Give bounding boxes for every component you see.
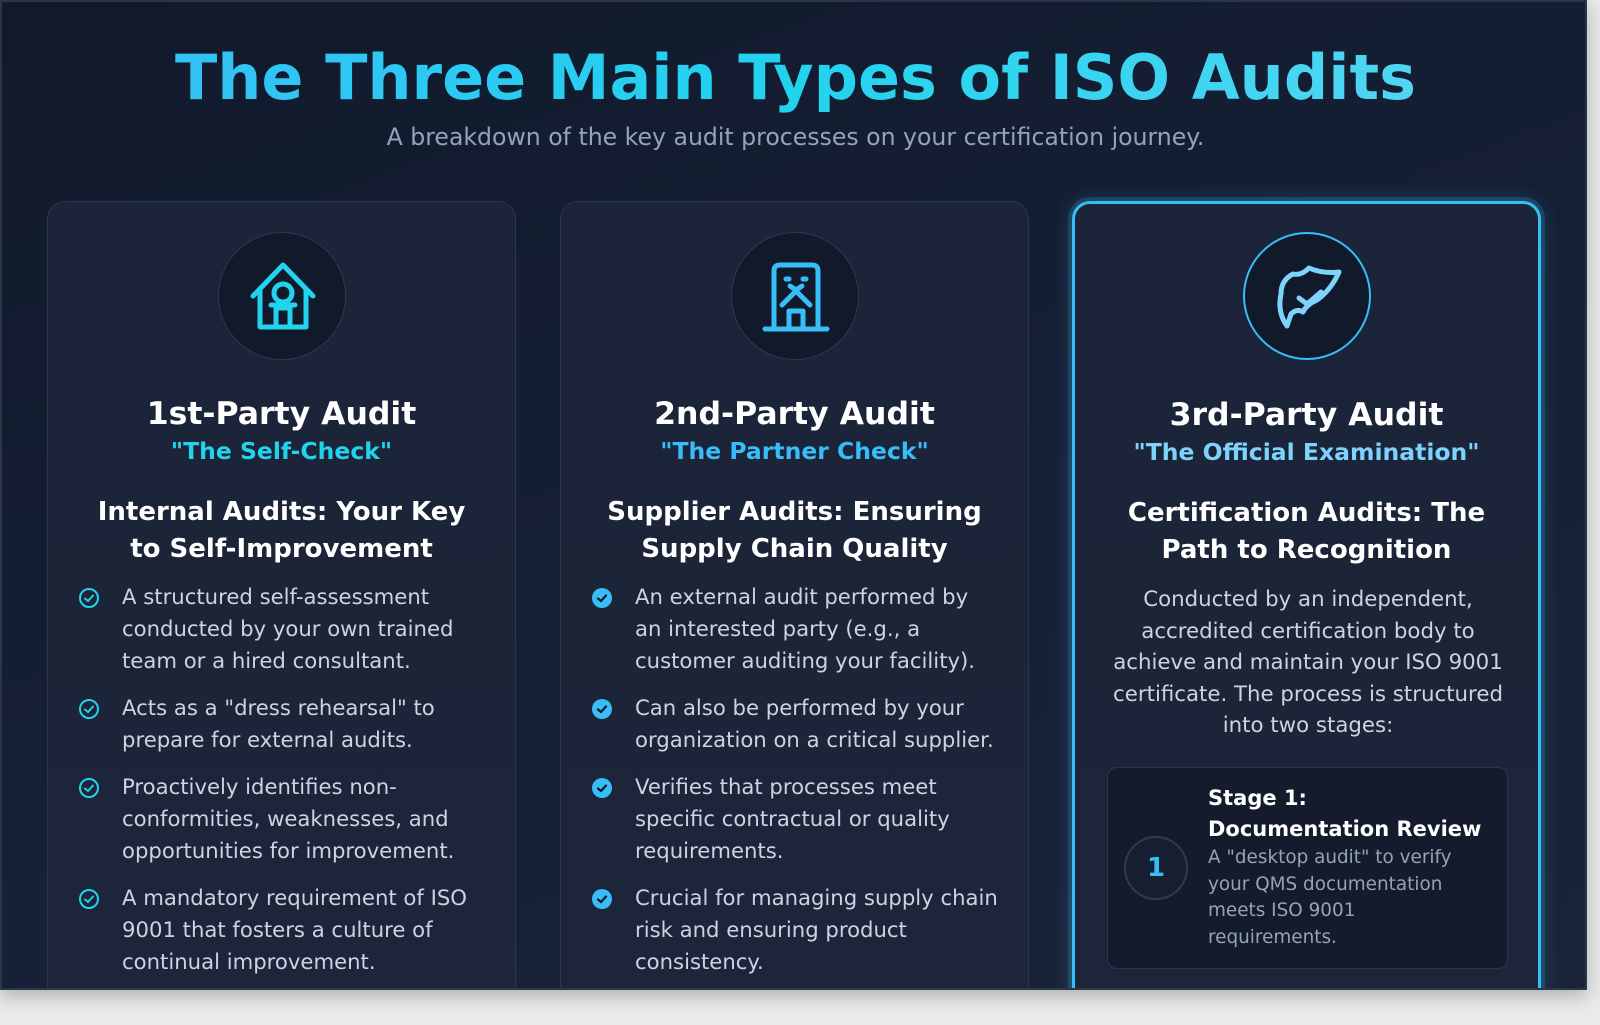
heading: 3rd-Party Audit	[1170, 397, 1443, 433]
title	[2, 36, 1589, 120]
subheading: Supplier Audits: Ensuring	[607, 497, 982, 527]
subheading	[98, 497, 465, 564]
tagline: "The Self-Check"	[171, 437, 392, 465]
stage number: 1	[1147, 853, 1165, 883]
icon: building	[731, 232, 859, 360]
stage description: A "desktop audit" to verify your QMS documentation meets ISO 9001 requirements.	[1208, 847, 1452, 948]
icon: house	[218, 232, 346, 360]
subheading: Certification Audits: The	[1128, 498, 1485, 528]
bullet list: Crucial for managing supply chain risk and ensuring product consistency.	[635, 885, 998, 974]
stage 1 box	[1107, 767, 1508, 969]
stage title: Documentation Review	[1208, 817, 1481, 841]
bullet list: Acts as a "dress rehearsal" to prepare for external audits.	[122, 695, 435, 752]
panel: 1st-party audit	[47, 201, 516, 1025]
panel: 2nd-party audit	[560, 201, 1029, 1025]
bullet list: Verifies that processes meet	[635, 774, 937, 799]
bullet list: customer auditing your facility).	[635, 648, 975, 673]
bullet list: A structured self-assessment conducted by your own trained team or a hired consultant.	[122, 584, 453, 673]
subheading: to Self-Improvement	[130, 534, 433, 564]
subtitle: A breakdown of the key audit processes on your certification journey.	[387, 123, 1204, 151]
tagline: "The Official Examination"	[1134, 438, 1480, 466]
subheading	[1128, 498, 1485, 565]
subheading: Supply Chain Quality	[641, 534, 948, 564]
title: The Three Main Types of ISO Audits	[175, 41, 1416, 114]
bullet list: Can also be performed by your organization on a critical supplier.	[635, 695, 994, 752]
stage number	[1124, 836, 1188, 900]
icon: shield check	[1243, 232, 1371, 360]
bullet list: Proactively identifies non-conformities, weaknesses, and opportunities for improvement.	[122, 774, 454, 863]
subheading: Internal Audits: Your Key	[98, 497, 465, 527]
heading: 1st-Party Audit	[147, 396, 416, 432]
bullet list: A mandatory requirement of ISO 9001 that fosters a culture of continual improvement.	[122, 885, 467, 974]
subheading: Path to Recognition	[1162, 535, 1451, 565]
bullet list: specific contractual or quality requirements.	[635, 806, 950, 863]
tagline: "The Partner Check"	[660, 437, 929, 465]
bullet list	[592, 584, 998, 974]
stage title: Stage 1:	[1208, 786, 1307, 810]
heading: 2nd-Party Audit	[654, 396, 935, 432]
stage title	[1208, 786, 1481, 841]
subheading	[607, 497, 982, 564]
bullet list	[79, 584, 467, 974]
description: Conducted by an independent, accredited certification body to achieve and maintain your ISO 9001 certificate. The process is structured into two stages:	[1113, 587, 1503, 738]
bullet list: an interested party (e.g., a	[635, 616, 920, 641]
bullet list: An external audit performed by	[635, 584, 968, 609]
panel: 3rd-party audit	[1072, 201, 1541, 1025]
